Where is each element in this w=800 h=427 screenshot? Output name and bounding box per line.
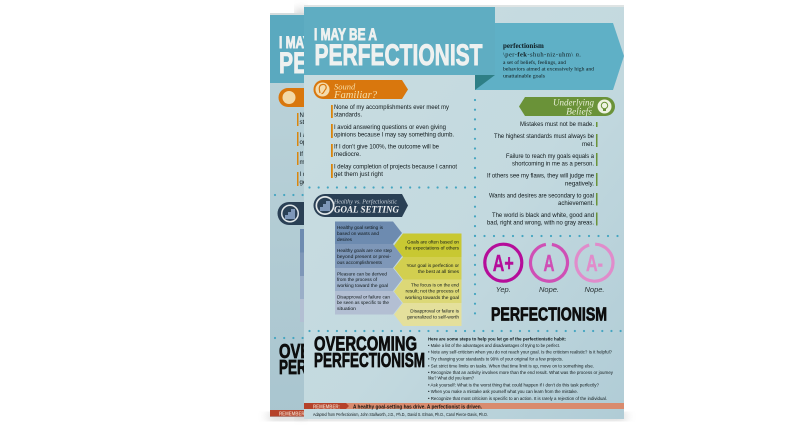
definition ribbon: perfectionism: [503, 42, 544, 50]
back poster: PERFECTIONISM: [279, 357, 390, 379]
panel: underlying beliefs: [487, 97, 615, 227]
beliefs list: The highest standards must always be: [494, 133, 595, 140]
statements: I delay completion of projects because I cannot: [334, 163, 457, 170]
perfectionistic column: the expectations of others: [405, 245, 460, 251]
perfectionistic column: result; not the process of: [406, 289, 460, 295]
healthy column: beyond present or previ-: [337, 254, 391, 260]
grade A minus: [575, 244, 614, 294]
grade A plus: A+: [493, 250, 514, 276]
steps list: • Recognize that an activity involves more than the end result. What was the process or journey: [428, 370, 613, 376]
panel: grades: [485, 242, 614, 325]
remember banner: A healthy goal-setting has drive. A perfectionist is driven.: [353, 404, 482, 410]
overcoming heading: OVERCOMING: [314, 334, 417, 356]
grade A: Nope.: [539, 285, 559, 294]
steps list: • When you make a mistake ask yourself what you can learn from the mistake.: [428, 389, 578, 395]
back poster: PERFECTIONIST: [279, 47, 448, 80]
perfectionistic column: Disapproval or failure is: [410, 309, 460, 315]
back poster: get: [300, 179, 308, 186]
heading: sound familiar: Sound: [334, 82, 356, 92]
heading: sound familiar: [314, 80, 408, 101]
beliefs list: negatively.: [565, 180, 594, 187]
back poster: If I: [300, 151, 307, 158]
title header: PERFECTIONIST: [314, 39, 482, 72]
back poster: REMEMBER:: [279, 412, 306, 418]
grade A minus: Nope.: [584, 285, 605, 294]
statements: get them just right: [334, 171, 383, 178]
healthy column: [335, 222, 402, 314]
statements: [331, 104, 457, 178]
heading: goal setting: [314, 194, 408, 217]
perfectionistic column: working towards the goal: [405, 295, 459, 301]
healthy column: desires: [337, 237, 353, 243]
healthy column: situation: [337, 306, 356, 312]
beliefs list: Mistakes must not be made.: [520, 121, 594, 128]
steps list: • Ask yourself: What is the worst thing that could happen if I don't do this task perfectly?: [428, 383, 599, 389]
definition ribbon: unattainable goals: [503, 74, 545, 80]
back poster: [270, 13, 304, 417]
healthy column: be seen as specific to the: [337, 300, 389, 306]
grade A plus: Yep.: [496, 285, 511, 294]
healthy column: Healthy goals are one step: [337, 248, 392, 254]
title header: [304, 7, 495, 75]
beliefs list: If others see my flaws, they will judge me: [487, 173, 595, 180]
grade A plus: [485, 244, 522, 294]
heading: underlying beliefs: Beliefs: [566, 106, 592, 118]
definition ribbon: behaviors aimed at excessively high and: [503, 68, 595, 72]
heading: underlying beliefs: [519, 97, 615, 118]
grade A minus: A-: [586, 250, 603, 276]
remember banner: [304, 403, 624, 410]
statements: None of my accomplishments ever meet my: [334, 104, 450, 111]
perfectionistic column: [394, 234, 462, 326]
beliefs list: The world is black and white, good and: [492, 212, 594, 219]
heading: goal setting: Healthy vs. Perfectionistic: [333, 198, 397, 206]
beliefs list: met.: [582, 141, 594, 148]
perfectionistic column: The focus is on the end: [411, 283, 459, 289]
healthy column: Healthy goal setting is: [337, 225, 384, 231]
healthy column: Disapproval or failure can: [337, 294, 390, 300]
healthy column: based on wants and: [337, 231, 379, 237]
grade A: [528, 242, 570, 294]
steps list: [428, 336, 613, 402]
steps list: • Make a list of the advantages and disadvantages of trying to be perfect.: [428, 343, 560, 349]
back poster: stan: [300, 119, 311, 126]
healthy column: working toward the goal: [337, 283, 388, 289]
grade A: A: [544, 250, 554, 276]
heading: sound familiar: Familiar?: [333, 90, 377, 101]
panel: sound familiar: [314, 80, 457, 178]
remember banner: REMEMBER:: [313, 404, 340, 410]
back poster: I av: [300, 132, 310, 139]
statements: mediocre.: [334, 151, 361, 158]
definition ribbon: [475, 23, 624, 90]
definition ribbon: a set of beliefs, feelings, and: [503, 61, 567, 66]
beliefs list: Wants and desires are secondary to goal: [489, 193, 594, 200]
healthy column: Pleasure can be derived: [337, 271, 387, 277]
heading: underlying beliefs: Underlying: [553, 98, 594, 108]
beliefs list: shortcoming in me as a person.: [512, 161, 594, 168]
perfectionism label: PERFECTIONISM: [491, 304, 607, 325]
steps list: • Try changing your standards to 90% of your original for a few projects.: [428, 356, 563, 362]
heading: goal setting: GOAL SETTING: [334, 204, 399, 214]
back poster: I MAY BE A: [279, 34, 342, 52]
definition ribbon: \per-fek-shuh-niz-uhm\ n.: [503, 52, 581, 58]
overcoming heading: [314, 334, 425, 372]
steps list: • Note any self-criticism when you do not reach your goal. Is the criticism realistic? Is it helpful?: [428, 350, 612, 356]
steps list: • Recognize that most criticism is specific to an action. It is rarely a rejection of the individual.: [428, 396, 607, 402]
back poster: None: [300, 112, 315, 119]
back poster: I del: [300, 171, 311, 178]
statements: If I don't give 100%, the outcome will be: [334, 144, 440, 151]
back poster: med: [300, 159, 311, 166]
healthy column: from the process of: [337, 277, 378, 283]
steps list: Here are some steps to help you let go of the perfectionistic habit:: [428, 336, 566, 342]
panel: goal setting: [314, 194, 462, 326]
perfectionistic column: generalized to self-worth: [407, 315, 459, 321]
back poster: opin: [300, 139, 311, 146]
poster background: [304, 5, 624, 419]
dotted dividers: [310, 100, 624, 331]
beliefs list: bad, right and wrong, with no gray areas.: [487, 220, 594, 227]
overcoming heading: PERFECTIONISM: [314, 350, 425, 372]
perfectionistic column: Goals are often based on: [407, 240, 459, 246]
beliefs list: achievement.: [558, 200, 594, 207]
title header: I MAY BE A: [314, 25, 377, 44]
steps list: • Set strict time limits on tasks. When that time limit is up, move on to something else.: [428, 363, 594, 369]
perfectionistic column: Your goal is perfection or: [406, 263, 459, 269]
healthy column: ous accomplishments: [337, 260, 383, 266]
back poster: OVERCOMING: [279, 341, 382, 363]
front poster: [304, 5, 624, 419]
beliefs list: [487, 121, 598, 227]
beliefs list: Failure to reach my goals equals a: [506, 153, 595, 160]
steps list: like? What did you learn?: [428, 376, 474, 382]
perfectionistic column: the best at all times: [418, 269, 460, 275]
shadows: [268, 10, 626, 420]
credits: Adapted from Perfectionism, John Stallworth, J.D., Ph.D., David S. Elman, Ph.D., Carol Pierce-Davis, Ph.D.: [313, 412, 488, 417]
statements: opinions because I may say something dumb.: [334, 132, 454, 139]
statements: I avoid answering questions or even giving: [334, 124, 446, 131]
statements: standards.: [334, 112, 362, 119]
